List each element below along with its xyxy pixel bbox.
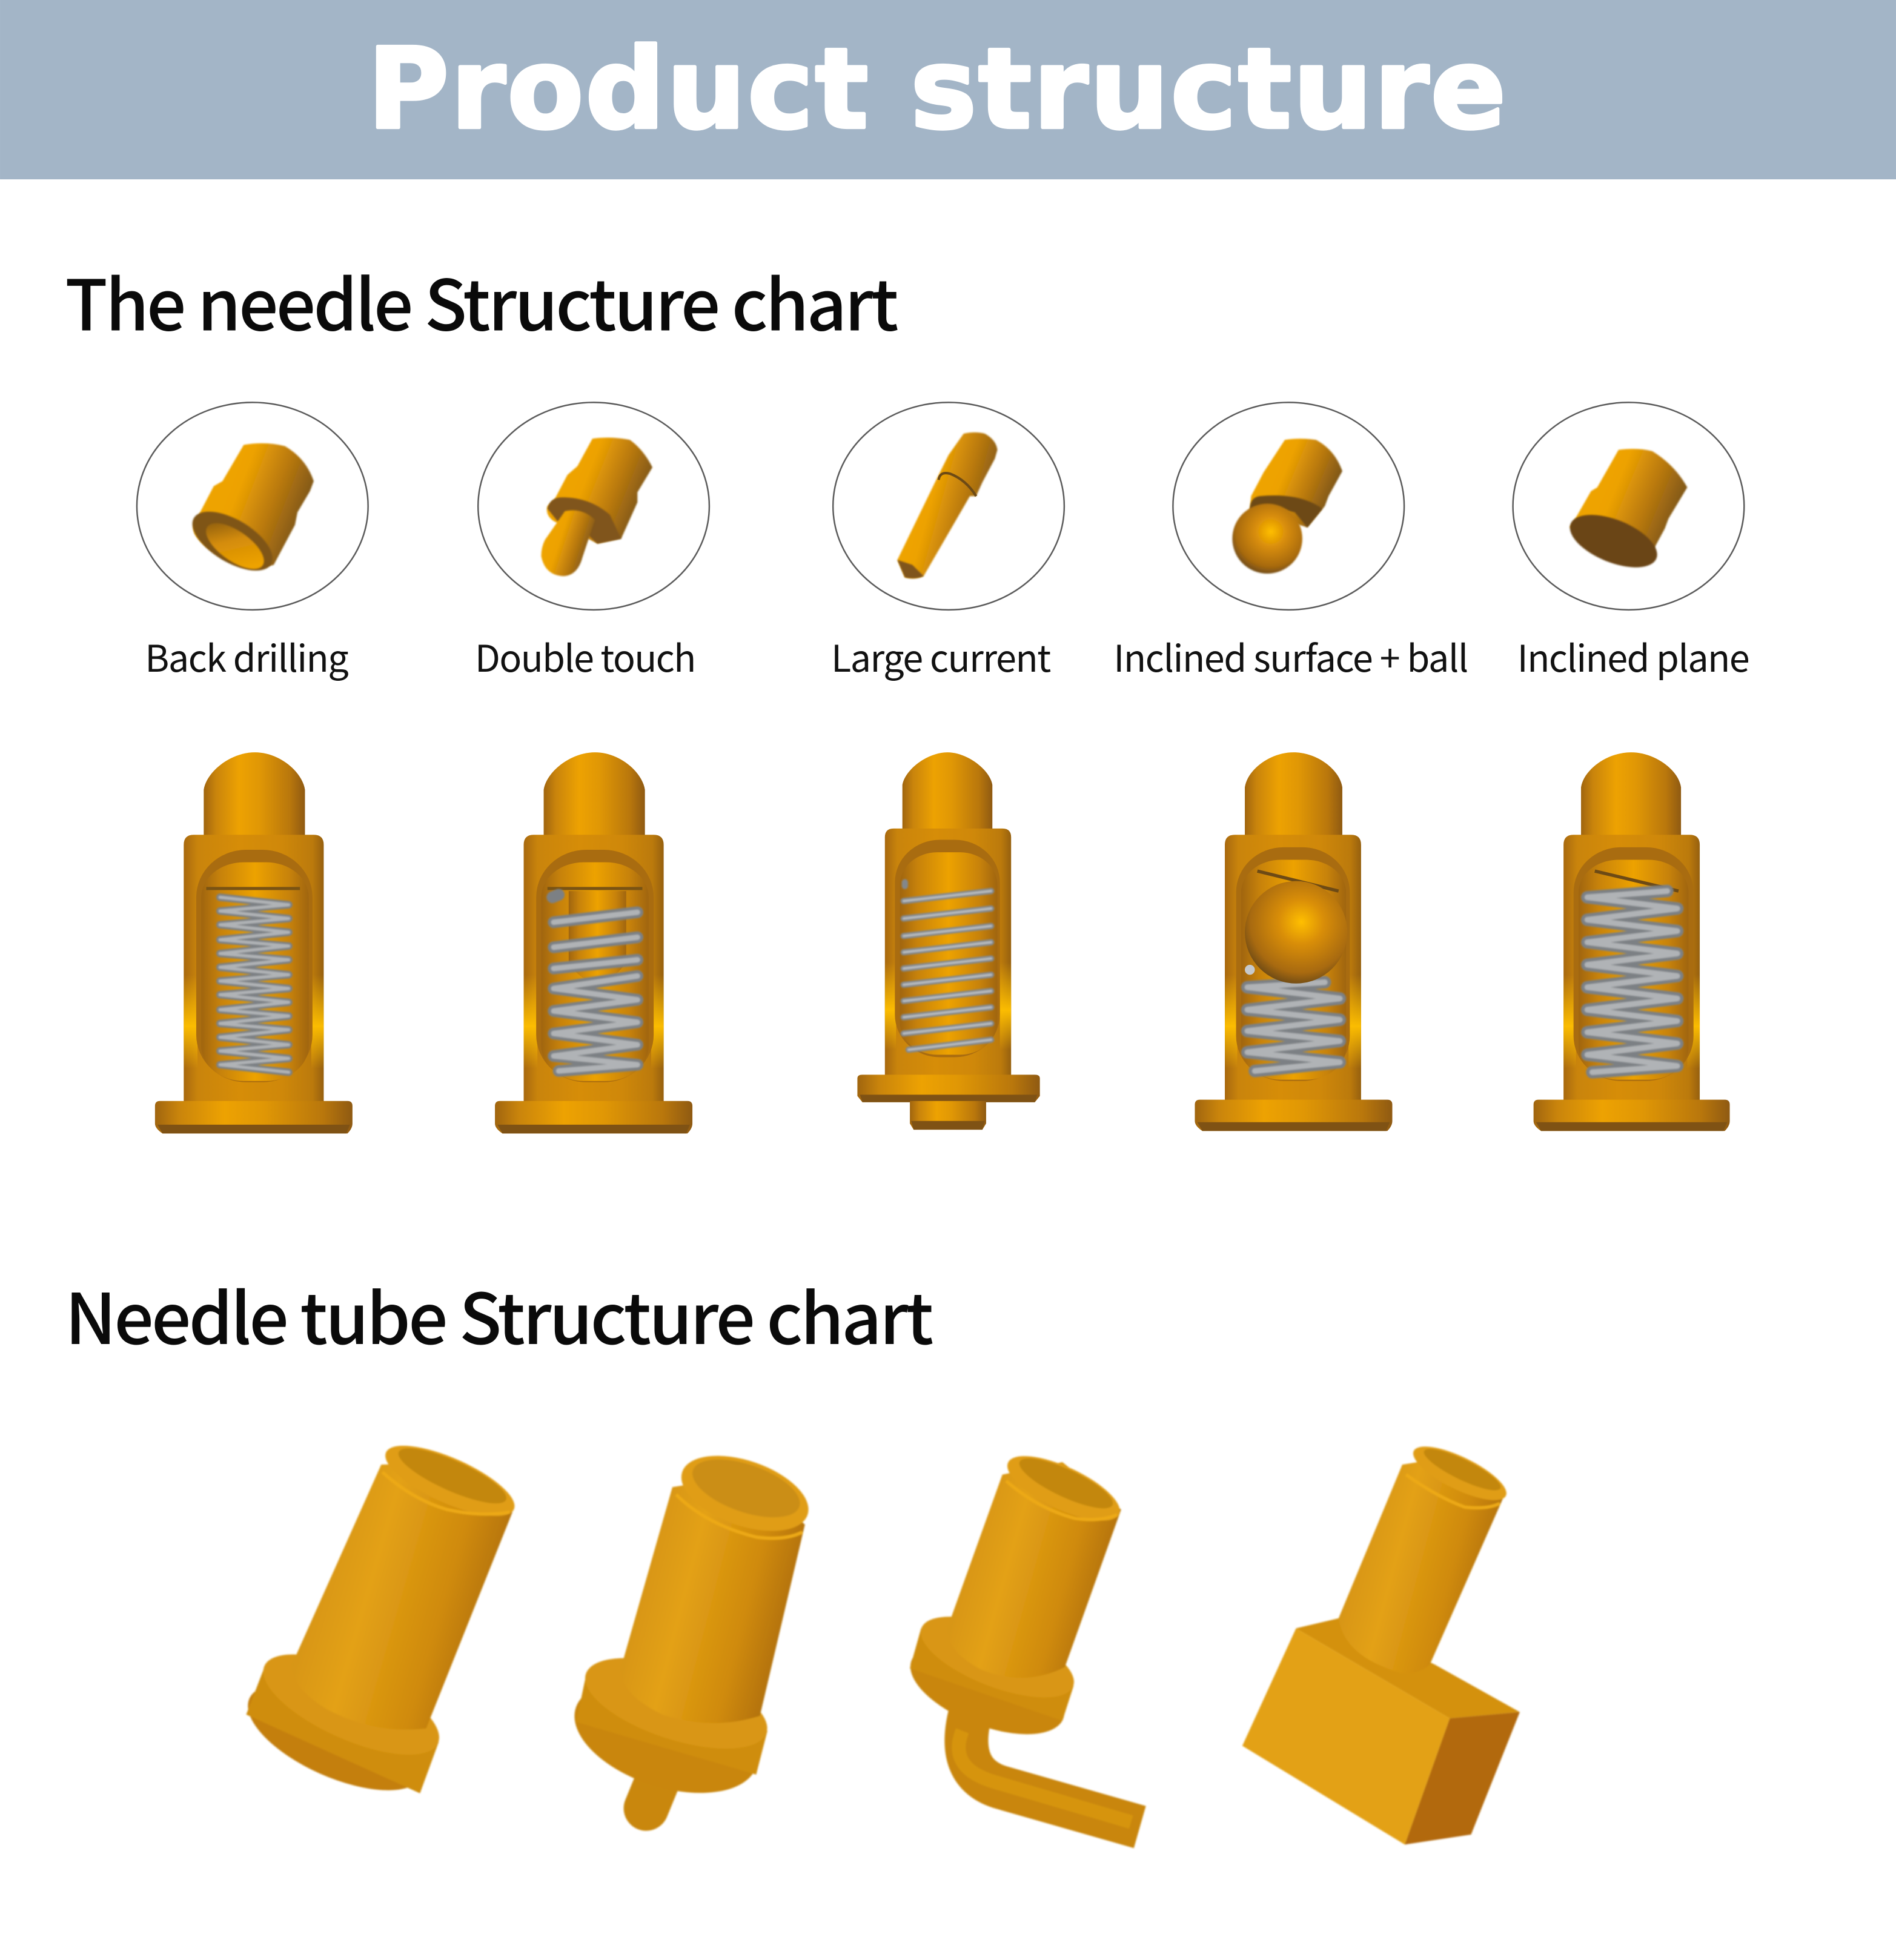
panel: double touch tip <box>478 402 709 610</box>
label: large current: Large current <box>831 629 1051 683</box>
needle: double touch cross-section <box>495 752 692 1133</box>
label: inclined surface plus ball: Inclined surface + ball <box>1113 629 1468 683</box>
needle tube 1: flanged <box>233 1432 523 1812</box>
needle tube 4: rectangular block <box>1242 1436 1520 1844</box>
needle tube 2: flange with pin <box>560 1441 818 1814</box>
header band with title: Product structure <box>368 25 1506 154</box>
panel: back drilling tip <box>137 402 368 610</box>
label: double touch: Double touch <box>475 629 696 683</box>
needle: inclined plane cross-section <box>1534 752 1730 1131</box>
panel: large current tip <box>833 402 1064 610</box>
needle tube 3: bent pin <box>898 1443 1140 1827</box>
label: inclined plane: Inclined plane <box>1517 629 1750 683</box>
label: back drilling: Back drilling <box>145 629 349 683</box>
heading: needle tube structure chart: Needle tube Structure chart <box>65 1263 933 1365</box>
needle: back drilling cross-section <box>155 752 353 1133</box>
heading: needle structure chart: The needle Structure chart <box>65 250 899 351</box>
panel: inclined plane tip <box>1513 402 1744 610</box>
header band with title <box>0 0 1896 179</box>
panel: inclined surface plus ball tip <box>1173 402 1404 610</box>
needle: large current cross-section <box>857 752 1040 1130</box>
needle: inclined surface plus ball cross-section <box>1195 752 1392 1131</box>
